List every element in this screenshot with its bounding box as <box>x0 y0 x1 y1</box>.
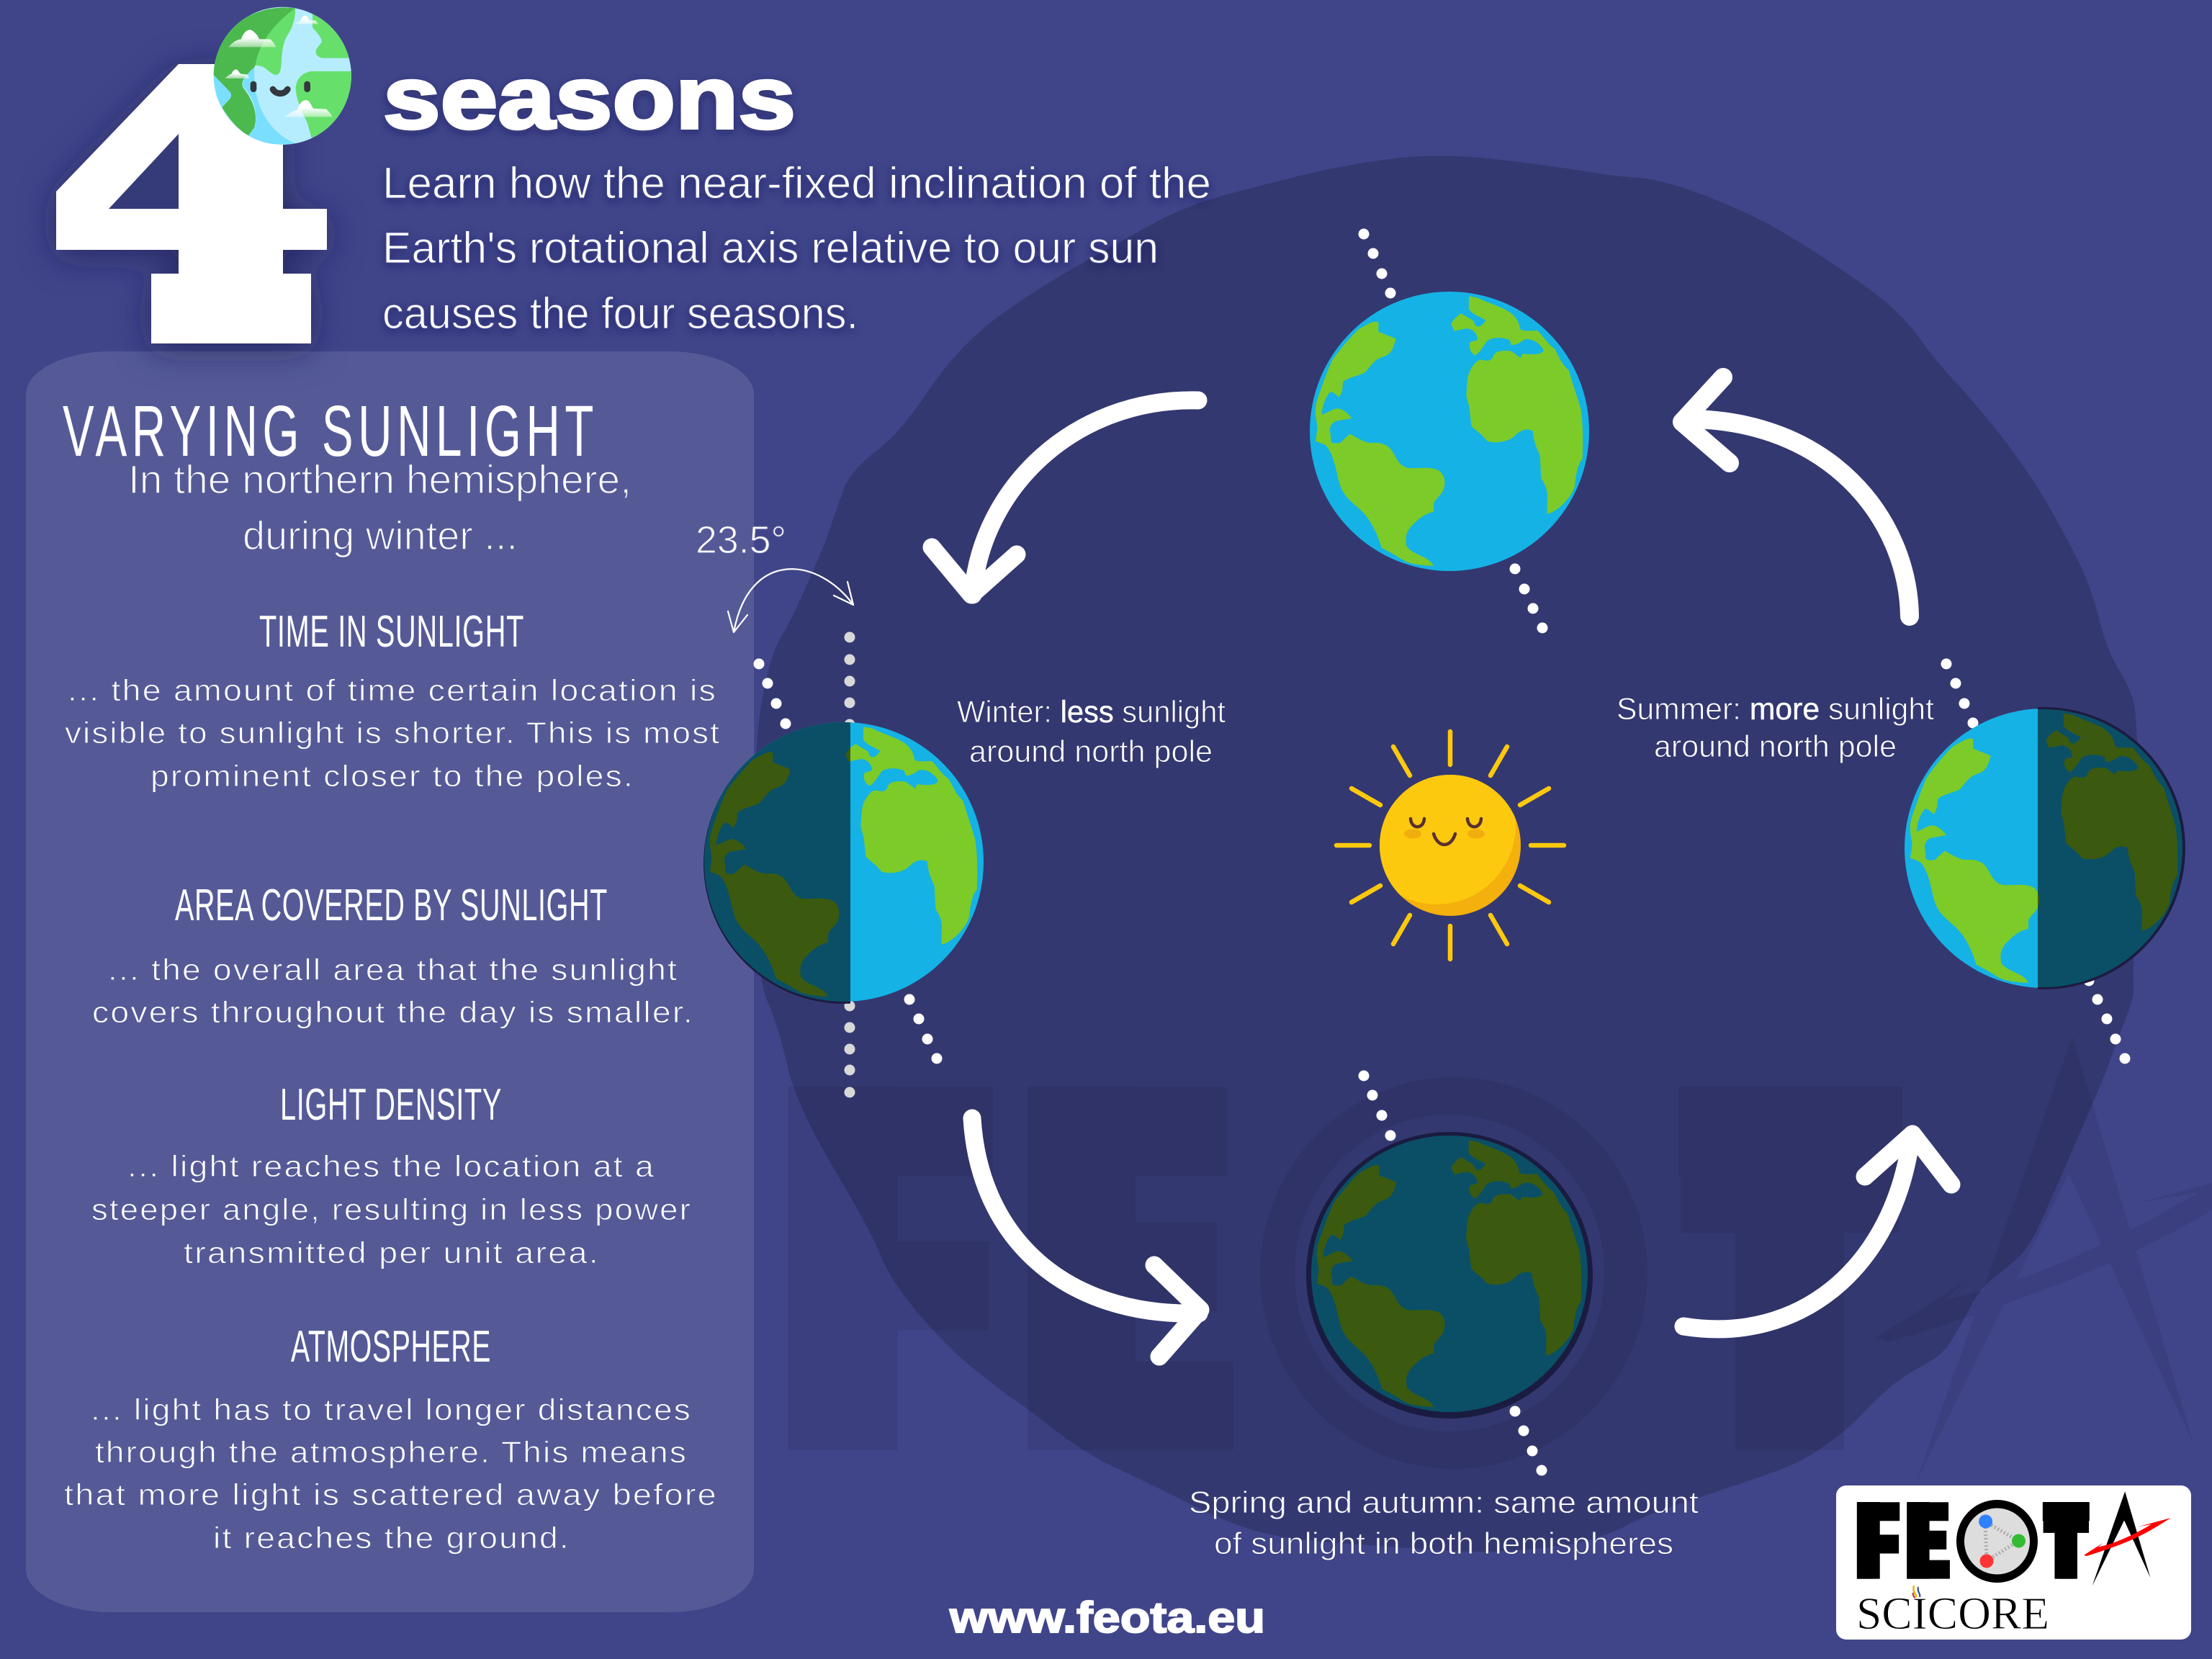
logo: FEOTA SciCore: SCICORE <box>1856 1588 2049 1639</box>
logo: FEOTA SciCore <box>1836 1484 2191 1640</box>
arrow: tilt angle arc <box>728 569 853 632</box>
panel intro text: In the northern hemisphere, <box>128 457 631 502</box>
caption: winter <box>957 695 1226 769</box>
section: time in sunlight: visible to sunlight is shorter. This is most <box>65 716 721 750</box>
caption: spring and autumn <box>1189 1485 1699 1561</box>
axial tilt label: 23.5°: 23.5° <box>696 518 786 562</box>
arrow: summer to autumn, top left <box>932 400 1198 595</box>
section: light density: transmitted per unit area. <box>184 1236 600 1269</box>
earth: winter, left half in shadow, with axis dots <box>703 632 984 1097</box>
section: light density: steeper angle, resulting in less power <box>91 1192 692 1226</box>
earth: spring and autumn position, dim, with axis dots <box>1306 1070 1593 1476</box>
arrow: bottom left <box>972 1118 1200 1357</box>
caption: summer: Summer: more sunlight <box>1617 692 1934 727</box>
logo: FEOTA SciCore: F <box>1855 1484 1899 1596</box>
watermark: FEOTA logo: F <box>778 1002 992 1534</box>
caption: summer: around north pole <box>1654 729 1897 764</box>
section: area covered by sunlight: ... the overall area that the sunlight <box>108 953 678 986</box>
intro text: Learn how the near-fixed inclination of the <box>382 158 1211 207</box>
panel: varying sunlight <box>26 351 754 1612</box>
big numeral 4: 4 <box>55 6 287 352</box>
section: area covered by sunlight: covers throughout the day is smaller. <box>92 995 694 1029</box>
panel intro text <box>128 457 631 558</box>
section: light density: LIGHT DENSITY <box>280 1080 502 1130</box>
section: time in sunlight: ... the amount of time certain location is <box>68 673 717 707</box>
panel heading: varying sunlight: VARYING SUNLIGHT <box>63 391 598 472</box>
arrow: top right <box>1682 377 1910 616</box>
section: atmosphere: that more light is scattered away before <box>64 1478 718 1511</box>
caption: winter: Winter: less sunlight <box>957 695 1226 729</box>
section: atmosphere <box>64 1322 718 1555</box>
caption: spring and autumn: Spring and autumn: same amount <box>1189 1485 1699 1520</box>
logo: FEOTA SciCore: E <box>1905 1485 1950 1597</box>
section: atmosphere: ... light has to travel longer distances <box>91 1393 692 1426</box>
section: time in sunlight <box>65 607 721 793</box>
intro text <box>382 158 1211 338</box>
watermark: FEOTA logo <box>778 1002 2212 1534</box>
website url: www.feota.eu <box>949 1593 1265 1642</box>
earth: summer, right half in shadow, with axis dots <box>1903 658 2185 1064</box>
dark blob behind the orbit <box>755 156 2139 1552</box>
section: area covered by sunlight <box>92 881 694 1029</box>
intro text: Earth's rotational axis relative to our sun <box>382 223 1159 272</box>
intro text: causes the four seasons. <box>382 289 858 338</box>
watermark: FEOTA logo: E <box>1018 1002 1233 1533</box>
arrow: bottom right <box>1683 1134 1951 1329</box>
section: time in sunlight: TIME IN SUNLIGHT <box>259 607 524 657</box>
section: light density <box>91 1080 692 1269</box>
watermark: FEOTA logo: T <box>1687 1003 1893 1534</box>
section: atmosphere: ATMOSPHERE <box>291 1322 491 1372</box>
icon: smiling sun <box>1336 732 1564 959</box>
icon: smiling globe <box>213 7 355 145</box>
section: light density: ... light reaches the location at a <box>127 1149 655 1183</box>
section: area covered by sunlight: AREA COVERED BY SUNLIGHT <box>175 881 608 930</box>
caption: winter: around north pole <box>969 734 1213 769</box>
section: atmosphere: it reaches the ground. <box>213 1521 570 1555</box>
logo: FEOTA SciCore: T <box>2044 1484 2087 1596</box>
caption: spring and autumn: of sunlight in both hemispheres <box>1214 1527 1673 1561</box>
section: time in sunlight: prominent closer to the poles. <box>150 759 634 793</box>
caption: summer <box>1617 692 1934 764</box>
panel intro text: during winter ... <box>243 513 518 558</box>
earth: summer-solstice top position with axis dots <box>1310 229 1589 634</box>
section: atmosphere: through the atmosphere. This means <box>95 1435 688 1469</box>
title: seasons: seasons <box>383 49 796 148</box>
